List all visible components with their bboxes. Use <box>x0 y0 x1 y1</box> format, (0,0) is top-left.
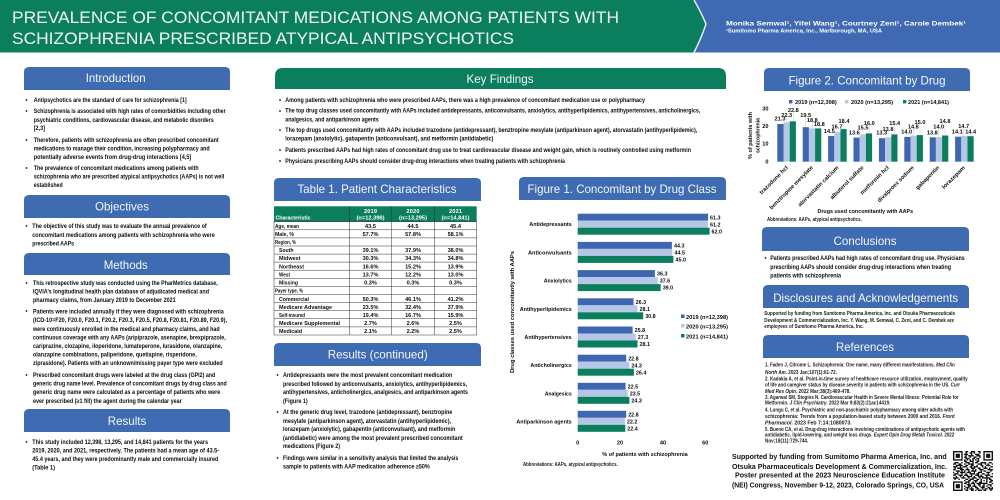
disclosure text: Development & Commercialization, Inc. Y. Wang, M. Semwal, C. Zeni, and C. Dembek are <box>764 318 954 324</box>
bar value labels <box>775 108 977 137</box>
heading: methods: Methods <box>104 258 148 272</box>
reference list: Pharmacol. 2023 Feb 7;14:1080073. <box>765 421 852 427</box>
results continued bullets: mesylate (antiparkinson agent), atorvastatin (antihyperlipidemic), <box>283 419 451 425</box>
heading: conclusions: Conclusions <box>834 234 896 248</box>
bar value labels: 26.4 <box>636 370 647 376</box>
bar value labels: 13.3 <box>876 131 887 137</box>
table rows: 30.3% <box>363 256 378 262</box>
table rows: 16.6% <box>363 264 378 270</box>
panel: references <box>763 335 969 445</box>
bar value labels: 30.8 <box>645 314 656 320</box>
table rows: 37.9% <box>405 248 421 254</box>
key findings bullets: Patients prescribed AAPs had high rates of concomitant drug use to treat cardiovascular disease and weight gain, which is routinely controlled using metformin <box>285 148 691 154</box>
results text: 2019, 2020, and 2021, respectively. The patients had a mean age of 43.5- <box>32 448 219 454</box>
authors and affiliation <box>726 20 966 34</box>
heading: disclosures <box>763 285 969 308</box>
reference list: 5. Bueno CA, et al. Drug-drug interactions involving combinations of antipsychotic agents with <box>765 427 965 433</box>
objectives text: prescribed AAPs <box>32 241 75 247</box>
introduction bullets: schizophrenia who are prescribed atypical antipsychotics (AAPs) is not well <box>34 174 225 180</box>
legend: 2021 (n=14,841) <box>686 334 728 340</box>
x axis ticks: 20 <box>617 441 623 447</box>
methods bullets: continuous coverage with any AAPs (aripiprazole, asenapine, brexpiprazole, <box>33 335 226 341</box>
x axis ticks: 0 <box>576 441 579 447</box>
bar value labels: 14.8 <box>940 119 950 125</box>
results text: This study included 12,398, 13,295, and 14,841 patients for the years <box>32 440 209 446</box>
legend: 2021 (n=14,841) <box>908 100 949 106</box>
key findings bullets: The top drug classes used concomitantly with AAPs included antidepressants, anticonvulsants, anxiolytics, antihyperlipidemics, antihypertensives, anticholinergics, <box>285 109 701 115</box>
table rows: 2.1% <box>364 329 377 335</box>
heading: figure 2 <box>764 68 970 91</box>
results text: 45.4 years, and they were predominantly male and commercially insured <box>32 457 219 463</box>
introduction bullets: [2,3] <box>34 126 45 132</box>
reference list: 1. Faden J, Citrome L. Schizophrenia: One name, many different manifestations. Med Clin <box>765 363 955 369</box>
category labels: Analgesics <box>545 391 572 397</box>
conclusions text: patients with schizophrenia <box>770 273 842 279</box>
methods bullets: pharmacy claims, from January 2019 to December 2021 <box>33 298 176 304</box>
table rows: 46.1% <box>405 297 421 303</box>
panel: figure 2 <box>748 68 977 223</box>
x axis title: % of patients with schizophrenia <box>602 452 689 458</box>
category labels: Antiparkinson agents <box>516 419 572 425</box>
bar value labels: 44.3 <box>674 244 684 250</box>
table rows: 16.7% <box>405 313 421 319</box>
table rows: 37.9% <box>448 305 463 311</box>
table header row <box>276 209 470 222</box>
table rows: Male, % <box>275 232 294 238</box>
table rows: Missing <box>279 281 299 287</box>
heading: key findings <box>275 68 726 89</box>
panel: disclosures and acknowledgements <box>763 285 969 330</box>
bar value labels: 24.3 <box>631 363 642 369</box>
reference list: 3. Agarwal SM, Stogios N. Cardiovascular Health in Severe Mental Illness: Potential Role for <box>765 395 959 401</box>
table rows: 15.2% <box>405 264 421 270</box>
panel: introduction <box>24 67 230 189</box>
bar value labels: 39.0 <box>663 286 673 292</box>
heading: objectives: Objectives <box>95 200 149 214</box>
title: PREVALENCE OF CONCOMITANT MEDICATIONS AMONG PATIENTS WITH <box>12 8 619 27</box>
bar value labels: 14.5 <box>824 129 835 135</box>
bar value labels: 22.3 <box>781 113 792 119</box>
funding and congress statement: Supported by funding from Sumitomo Pharma America, Inc. and <box>732 452 947 461</box>
icon: QR code <box>953 451 993 491</box>
heading: references: References <box>836 340 894 354</box>
table rows: 19.4% <box>363 313 378 319</box>
table header row: Characteristic <box>276 216 310 222</box>
results continued bullets: (antidiabetic) were among the most prevalent prescribed concomitant <box>283 436 463 442</box>
disclosure text <box>764 311 955 330</box>
legend: 2019 (n=12,398) <box>686 315 728 321</box>
results continued bullets: prescribed followed by anticonvulsants, anxiolytics, antihyperlipidemics, <box>283 382 467 388</box>
panel: results <box>24 409 230 471</box>
heading: introduction: Introduction <box>86 71 146 85</box>
reference list: of life and caregiver status by disease severity in patients with schizophrenia in the US. Curr <box>765 383 961 389</box>
methods bullets: (ICD-10=F20, F20.0, F20.1, F20.2, F20.3, F20.5, F20.8, F20.81, F20.89, F20.9), <box>33 318 227 324</box>
funding and congress statement: (NEI) Congress, November 9-12, 2023, Colorado Springs, CO, USA <box>732 480 944 490</box>
category labels: Antihypertensives <box>524 335 572 341</box>
heading: results <box>24 409 230 432</box>
disclosure text: employees of Sumitomo Pharma America, Inc. <box>764 324 864 330</box>
methods bullets: generic drug name level. Prevalence of concomitant drugs by drug class and <box>33 381 227 387</box>
bars <box>578 214 710 432</box>
bar value labels: 44.5 <box>674 250 685 256</box>
bar value labels: 18.4 <box>839 119 850 125</box>
table rows: 43.5 <box>365 224 376 230</box>
bar value labels: 22.2 <box>627 419 637 425</box>
category labels: Antihyperlipidemics <box>520 307 572 313</box>
bar value labels: 45.0 <box>676 258 686 264</box>
bar value labels: 28.1 <box>640 342 650 348</box>
table header row: (n=13,295) <box>399 216 427 222</box>
introduction bullets: The prevalence of concomitant medications among patients with <box>34 166 199 172</box>
bar value labels: 14.1 <box>952 130 963 136</box>
introduction bullets: potentially adverse events from drug-drug interactions [4,5] <box>34 155 191 161</box>
title <box>12 8 619 48</box>
title: SCHIZOPHRENIA PRESCRIBED ATYPICAL ANTIPSYCHOTICS <box>12 29 514 48</box>
conclusions text: prescribing AAPs should consider drug-drug interactions when treating <box>770 265 951 271</box>
results continued bullets: Findings were similar in a sensitivity analysis that limited the analysis <box>283 456 459 462</box>
bar value labels: 14.0 <box>933 125 944 131</box>
category labels: Antidepressants <box>529 222 572 228</box>
table rows: Age, mean <box>275 224 299 230</box>
table rows: 12.2% <box>405 272 421 278</box>
rotated drug labels: albuterol sulfate <box>829 165 865 201</box>
bar value labels: 26.3 <box>636 300 646 306</box>
x axis ticks <box>576 441 708 447</box>
results continued bullets: lorazepam (anxiolytic), gabapentin (anticonvulsant), and metformin <box>283 427 456 433</box>
bar value labels: 61.2 <box>710 222 720 228</box>
rotated drug labels: metformin hcl <box>860 165 891 196</box>
table rows: 2.5% <box>449 329 462 335</box>
bar value labels <box>627 215 722 432</box>
heading: table 1 <box>274 178 481 201</box>
introduction bullets: medications to manage their condition, increasing polypharmacy and <box>34 146 210 152</box>
heading: results continued: Results (continued) <box>328 348 428 362</box>
heading: results continued <box>274 343 481 366</box>
figure 2 abbreviations: Abbreviations: AAPs, atypical antipsychotics. <box>767 217 862 223</box>
reference list: schizophrenia: Trends from a population-based study between 2000 and 2016. Front <box>765 414 955 420</box>
panel: figure 1 <box>510 177 728 468</box>
table header row: 2020 <box>406 209 420 215</box>
bar value labels: 15.4 <box>889 121 901 127</box>
results continued bullets: Antidepressants were the most prevalent concomitant medication <box>283 373 453 379</box>
rotated drug labels: divalproex sodium <box>877 165 916 204</box>
table rows: 0.3% <box>449 281 462 287</box>
table rows: 34.3% <box>405 256 421 262</box>
rotated drug labels: lorazepam <box>941 165 967 191</box>
heading: figure 1 <box>519 177 726 200</box>
heading: table 1: Table 1. Patient Characteristics <box>298 182 456 196</box>
key findings bullets <box>279 98 701 165</box>
y axis: 30 <box>762 107 768 113</box>
results continued bullets: sample to patients with AAP medication adherence ≥50% <box>283 464 430 470</box>
bar value labels: 14.8 <box>908 124 919 130</box>
key findings bullets: The top drugs used concomitantly with AAPs included trazodone (antidepressant), benztropine mesylate (antiparkinson agent), atorvastatin (antihyperlipidemic), <box>285 128 698 134</box>
introduction bullets: Schizophrenia is associated with high rates of comorbidities including other <box>34 109 226 115</box>
authors and affiliation: Monika Semwal¹, Yifei Wang¹, Courtney Zeni¹, Carole Dembek¹ <box>726 20 966 28</box>
bar value labels: 37.6 <box>660 279 670 285</box>
bar value labels: 62.0 <box>712 229 722 235</box>
panel: results continued <box>274 343 481 470</box>
table rows: 32.4% <box>405 305 421 311</box>
table rows: Region, % <box>275 240 296 246</box>
bar value labels: 19.5 <box>800 113 811 119</box>
table header row: 2019 <box>364 209 377 215</box>
table rows: 0.3% <box>364 281 377 287</box>
results text <box>26 440 219 471</box>
heading: figure 2: Figure 2. Concomitant by Drug <box>788 74 946 88</box>
bar value labels: 18.8 <box>807 118 818 124</box>
bar value labels: 18.8 <box>814 122 825 128</box>
heading: results: Results <box>108 414 146 428</box>
leader lines <box>787 112 964 137</box>
bar value labels: 14.7 <box>958 124 969 130</box>
authors and affiliation: ¹Sumitomo Pharma America, Inc., Marlborough, MA, USA <box>726 28 882 34</box>
panel: objectives <box>24 195 230 247</box>
panel: key findings <box>275 68 726 165</box>
bar chart: concomitant by drug <box>748 100 977 215</box>
table rows: 38.0% <box>448 248 463 254</box>
table rows: Self-insured <box>279 313 305 319</box>
legend: 2019 (n=12,398) <box>795 100 837 106</box>
table header row: (n=14,841) <box>442 216 470 222</box>
introduction bullets: established <box>34 183 63 189</box>
legend <box>681 314 728 340</box>
rotated drug labels: gabapentin <box>915 165 942 191</box>
reference list: Nov;18(11):729-744. <box>765 439 809 445</box>
results text: (Table 1) <box>32 465 55 471</box>
table rows: 58.1% <box>448 232 463 238</box>
y axis <box>748 107 768 166</box>
y axis: % of patients with <box>748 111 754 159</box>
bar value labels: 22.8 <box>788 108 799 114</box>
methods bullets: This retrospective study was conducted using the PharMetrics database, <box>33 281 218 287</box>
table rows: 57.7% <box>363 232 378 238</box>
figure 1 abbreviations: Abbreviations: AAPs, atypical antipsychotics. <box>523 462 618 468</box>
reference list: 4. Lungu C, et al. Psychiatric and non-psychiatric polypharmacy among older adults with <box>765 408 953 414</box>
table rows: South <box>279 248 294 254</box>
bar value labels: 22.8 <box>628 412 639 418</box>
methods bullets: ever prescribed (≥1 fill) the agent during the calendar year <box>33 399 182 405</box>
table rows: Midwest <box>279 256 301 262</box>
methods bullets: olanzapine combinations, paliperidone, quetiapine, risperidone, <box>33 353 197 359</box>
bar value labels: 22.4 <box>627 426 639 432</box>
rotated drug labels: benztropine mesylate <box>769 165 815 211</box>
heading: methods <box>24 253 230 275</box>
table rows: 13.9% <box>448 264 463 270</box>
rotated drug labels: atorvastatin calcium <box>797 165 840 208</box>
poster header banner <box>0 0 1000 52</box>
table rows: 44.5 <box>408 224 418 230</box>
heading: conclusions <box>762 227 969 251</box>
table rows: 23.5% <box>363 305 378 311</box>
methods bullets: ziprasidone). Patients with an unknown/missing payer type were excluded <box>33 361 223 367</box>
bar value labels: 23.5 <box>630 391 640 397</box>
bar value labels: 22.5 <box>628 384 638 390</box>
reference list: 2. Kadakia A, et al. Point-in-time survey of healthcare resource utilization, employment, quality <box>765 376 968 382</box>
bar value labels: 22.8 <box>628 356 639 362</box>
table rows: 45.4 <box>450 224 462 230</box>
methods bullets: Patients were included annually if they were diagnosed with schizophrenia <box>33 309 224 315</box>
introduction bullets <box>26 98 226 189</box>
methods bullets <box>26 281 227 405</box>
funding and congress statement: Poster presented at the 2023 Neuroscience Education Institute <box>735 471 945 480</box>
table rows: Payer type, % <box>275 289 303 295</box>
heading: introduction <box>24 67 230 90</box>
reference list: antidiabetic, lipid-lowering, and weight loss drugs. Expert Opin Drug Metab Toxicol. 2022 <box>765 433 954 439</box>
table rows: 34.8% <box>448 256 463 262</box>
table header row: 2021 <box>449 209 462 215</box>
reference list <box>765 363 968 445</box>
bar value labels: 16.0 <box>864 121 875 127</box>
table rows <box>275 224 463 335</box>
table rows: West <box>279 272 290 278</box>
rotated drug labels <box>759 165 967 211</box>
reference list: North Am. 2023 Jan;107(1):61-72. <box>765 370 838 376</box>
legend <box>789 100 949 106</box>
table rows: 2.2% <box>407 329 419 335</box>
category labels: Anticholinergics <box>530 363 572 369</box>
results continued bullets: At the generic drug level, trazodone (antidepressant), benztropine <box>283 410 453 416</box>
conclusions text: Patients prescribed AAPs had high rates of concomitant drug use. Physicians <box>770 256 965 262</box>
introduction bullets: Therefore, patients with schizophrenia are often prescribed concomitant <box>34 138 219 144</box>
bar value labels: 24.3 <box>631 398 642 404</box>
bar value labels: 25.8 <box>635 328 645 334</box>
results continued bullets: medications (Figure 2) <box>283 444 340 450</box>
results continued bullets: (Figure 1) <box>283 399 308 405</box>
heading: key findings: Key Findings <box>466 72 534 86</box>
heading: figure 1: Figure 1. Concomitant by Drug Class <box>528 182 716 196</box>
heading: references <box>763 335 969 358</box>
bar value labels: 36.3 <box>657 272 668 278</box>
panel: conclusions <box>762 227 969 279</box>
objectives text <box>26 224 215 247</box>
heading: objectives <box>24 195 230 218</box>
table header row: (n=12,398) <box>356 216 385 222</box>
reference list: Med Res Opin. 2022 Mar;38(3):469-478. <box>765 389 851 395</box>
methods bullets: Prescribed concomitant drugs were labeled at the drug class (GPI2) and <box>33 373 216 379</box>
results continued bullets <box>277 373 469 470</box>
funding and congress statement <box>732 452 947 490</box>
objectives text: concomitant medications among patients with schizophrenia who were <box>32 233 215 239</box>
bar value labels: 13.8 <box>927 130 938 136</box>
category labels <box>516 222 572 425</box>
table rows: 0.3% <box>407 281 419 287</box>
introduction bullets: psychiatric conditions, cardiovascular disease, and metabolic disorders <box>34 118 214 124</box>
bar value labels: 14.0 <box>901 130 912 136</box>
key findings bullets: Physicians prescribing AAPs should consider drug-drug interactions when treating patients with schizophrenia <box>285 159 566 165</box>
bar value labels: 14.4 <box>965 130 977 136</box>
table rows: 2.7% <box>364 321 377 327</box>
panel: methods <box>24 253 230 405</box>
methods bullets: were continuously enrolled in the medical and pharmacy claims, and had <box>32 327 220 333</box>
bars <box>777 121 974 162</box>
table rows: Medicare Advantage <box>279 305 332 311</box>
key findings bullets: lorazepam (anxiolytic), gabapentin (anticonvulsant), and metformin (antidiabetic) <box>285 137 493 143</box>
y axis: 10 <box>762 142 768 148</box>
bar value labels: 16.7 <box>832 125 842 131</box>
objectives text: The objective of this study was to evaluate the annual prevalence of <box>32 224 208 230</box>
bar value labels: 13.6 <box>849 131 860 137</box>
bar value labels: 15.0 <box>915 120 925 126</box>
patient characteristics table <box>274 206 477 335</box>
bar value labels: 28.1 <box>640 307 650 313</box>
legend: 2020 (n=13,295) <box>686 324 728 330</box>
key findings bullets: Among patients with schizophrenia who were prescribed AAPs, there was a high prevalence of concomitant medication use or polypharmacy <box>285 98 646 104</box>
table rows: 13.7% <box>363 272 378 278</box>
table rows: 2.5% <box>449 321 462 327</box>
bar chart: concomitant by drug class <box>510 214 728 458</box>
rotated drug labels: trazodone hcl <box>759 165 790 196</box>
conclusions text <box>765 256 965 279</box>
table rows: 15.9% <box>448 313 463 319</box>
category labels: Anxiolytics <box>544 279 572 285</box>
bar value labels: 15.5 <box>858 126 868 132</box>
y axis: 20 <box>762 124 768 130</box>
introduction bullets: Antipsychotics are the standard of care for schizophrenia [1] <box>34 98 187 104</box>
bar value labels: 27.3 <box>638 335 648 341</box>
reference list: Metformin. J Clin Psychiatry. 2022 Mar 9;83(2):21ac14419. <box>765 401 891 407</box>
bar value labels: 21.3 <box>775 117 785 123</box>
funding and congress statement: Otsuka Pharmaceuticals Development & Commercialization, Inc. <box>732 462 947 471</box>
results continued bullets: antihypertensives, anticholinergics, analgesics, and antiparkinson agents <box>283 390 469 396</box>
panel: table 1 patient characteristics <box>274 178 481 335</box>
table rows: Northeast <box>279 264 304 270</box>
table rows: 57.8% <box>405 232 421 238</box>
category labels: Anticonvulsants <box>528 250 572 256</box>
key findings bullets: analgesics, and antiparkinson agents <box>285 118 379 124</box>
table rows: Medicaid <box>279 329 303 335</box>
y axis title: Drug classes used concomitantly with AAPs <box>510 251 516 373</box>
table rows: 50.3% <box>363 297 378 303</box>
table rows: Commercial <box>279 297 309 303</box>
table rows: Medicare Supplemental <box>279 321 340 327</box>
table rows: 41.2% <box>448 297 463 303</box>
methods bullets: generic drug name were calculated as a percentage of patients who were <box>33 390 221 396</box>
y axis: schizophrenia <box>756 117 762 153</box>
methods bullets: IQVIA’s longitudinal health plan database of adjudicated medical and <box>33 289 209 295</box>
methods bullets: cariprazine, clozapine, iloperidone, lumateperone, lurasidone, olanzapine, <box>33 344 223 350</box>
disclosure text: Supported by funding from Sumitomo Pharma America, Inc. and Otsuka Pharmaceuticals <box>764 311 955 317</box>
bar value labels: 13.8 <box>883 127 893 133</box>
x axis title: Drugs used concomitantly with AAPs <box>817 209 913 215</box>
x axis ticks: 40 <box>660 441 666 447</box>
bar value labels: 61.3 <box>710 215 720 221</box>
table rows: 13.0% <box>448 272 463 278</box>
table rows: 2.6% <box>407 321 419 327</box>
legend: 2020 (n=13,295) <box>851 100 893 106</box>
x axis ticks: 60 <box>702 441 708 447</box>
table rows: 39.1% <box>363 248 378 254</box>
heading: disclosures: Disclosures and Acknowledgements <box>773 291 958 305</box>
y axis: 0 <box>765 160 768 166</box>
